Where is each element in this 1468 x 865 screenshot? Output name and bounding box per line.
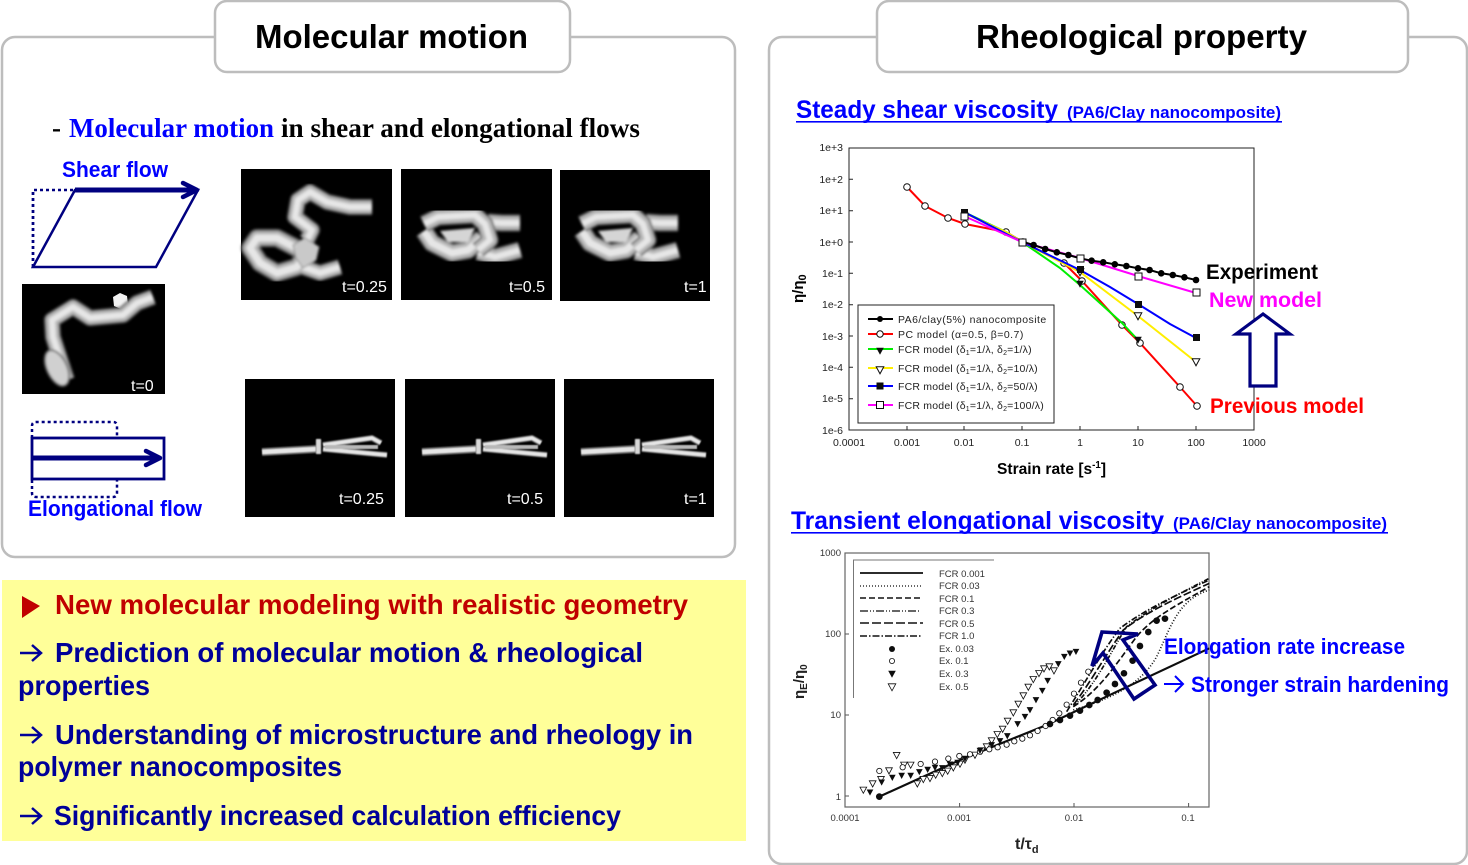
molecule image elongation t=1 <box>564 379 714 517</box>
subheading: molecular motion in flows: in shear and elongational flows <box>281 113 640 143</box>
molecule image shear t=1: t=1 <box>684 279 707 296</box>
chart legend: =1/λ, δ <box>970 381 1003 393</box>
chart legend: 2 <box>1003 387 1007 394</box>
chart legend: 2 <box>1003 406 1007 413</box>
x axis tick labels: 10 <box>1132 437 1144 449</box>
x axis title: t/τ <box>1015 836 1032 853</box>
Ex 0.1 markers <box>877 669 1091 774</box>
y axis tick labels: 1e-1 <box>822 268 843 280</box>
x axis tick labels <box>830 813 1195 824</box>
chart legend: 1 <box>966 406 970 413</box>
x axis tick labels: 0.01 <box>1065 813 1083 824</box>
chart legend: 1 <box>966 369 970 376</box>
chart legend: PA6/clay(5%) nanocomposite <box>898 314 1047 326</box>
chart legend: 1 <box>966 387 970 394</box>
title: rheological property <box>877 1 1408 72</box>
label: previous model: Previous model <box>1210 395 1364 418</box>
Ex 0.5 markers <box>860 664 1057 793</box>
Ex 0.03 markers <box>876 615 1168 800</box>
x axis tick labels: 100 <box>1187 437 1205 449</box>
x axis tick labels: 0.001 <box>894 437 920 449</box>
molecule image t=0: t=0 <box>131 378 154 395</box>
y axis title: 0 <box>797 274 809 280</box>
molecule image elongation t=0.5: t=0.5 <box>507 491 543 508</box>
molecule image elongation t=0.5 <box>405 379 555 517</box>
conclusion: understanding: polymer nanocomposites <box>18 751 342 782</box>
heading: steady shear viscosity: Steady shear viscosity <box>796 96 1058 124</box>
molecule image shear t=0.5 <box>401 169 552 300</box>
molecule image elongation t=0.25 <box>245 379 395 517</box>
y axis tick labels: 1e+1 <box>819 205 843 217</box>
y axis tick labels: 10 <box>830 710 841 721</box>
x axis tick labels: 0.01 <box>954 437 974 449</box>
conclusion: prediction: properties <box>18 670 150 701</box>
heading: transient elongational viscosity: (PA6/Clay nanocomposite) <box>1173 514 1387 533</box>
chart legend: FCR 0.1 <box>939 594 974 605</box>
x axis tick labels: 0.001 <box>947 813 971 824</box>
molecule image elongation t=1: t=1 <box>684 491 707 508</box>
chart legend: =50/λ) <box>1007 381 1038 393</box>
arrow: elongation rate increase <box>1092 632 1155 699</box>
y axis tick labels: 1 <box>836 792 841 803</box>
title: molecular motion: Molecular motion <box>255 18 528 55</box>
x axis tick labels: 1000 <box>1242 437 1266 449</box>
chart: steady shear viscosity <box>790 142 1266 478</box>
y axis tick labels: 1e+3 <box>819 142 843 154</box>
subheading: molecular motion in flows <box>52 113 640 143</box>
chart legend: =1/λ, δ <box>970 344 1003 356</box>
y axis title: η/η <box>790 280 807 303</box>
chart legend: FCR 0.5 <box>939 619 974 630</box>
y axis tick labels: 1e-6 <box>822 425 843 437</box>
chart legend: =10/λ) <box>1007 363 1038 375</box>
chart legend: PC model (α=0.5, β=0.7) <box>898 329 1024 341</box>
chart legend <box>854 560 994 698</box>
subheading: molecular motion in flows: - <box>52 113 61 143</box>
chart legend: FCR model (δ <box>898 400 966 412</box>
conclusion: efficiency: Significantly increased calculation efficiency <box>54 800 621 831</box>
chart legend: 2 <box>1003 369 1007 376</box>
series: FCR d2=10 <box>964 213 1200 366</box>
y axis tick labels <box>819 142 843 437</box>
elongational flow diagram <box>28 422 203 521</box>
y axis tick labels: 1e-4 <box>822 362 843 374</box>
y axis tick labels: 1000 <box>820 548 841 559</box>
FCR curves <box>879 578 1209 797</box>
title: molecular motion <box>215 1 570 72</box>
chart legend: 1 <box>966 350 970 357</box>
chart: transient elongational viscosity <box>791 548 1209 856</box>
conclusion: prediction: Prediction of molecular motion & rheological <box>55 637 643 668</box>
chart legend: FCR model (δ <box>898 363 966 375</box>
shear flow diagram <box>33 157 198 267</box>
heading: steady shear viscosity <box>796 96 1282 124</box>
label: elongation rate increase: Elongation rate increase <box>1164 634 1405 659</box>
x axis tick labels: 0.0001 <box>833 437 865 449</box>
y axis tick labels: 100 <box>825 629 841 640</box>
series: FCR d2=50 <box>961 209 1200 341</box>
series: FCR d2=1 <box>964 212 1142 344</box>
x axis title: Strain rate [s <box>997 461 1095 478</box>
x axis title: ] <box>1101 461 1106 478</box>
conclusion: understanding: Understanding of microstructure and rheology in <box>55 719 693 750</box>
y axis tick labels: 1e-3 <box>822 331 843 343</box>
chart legend: Ex. 0.5 <box>939 682 969 693</box>
chart legend: FCR model (δ <box>898 344 966 356</box>
y axis tick labels: 1e+0 <box>819 237 843 249</box>
series: experiment <box>961 213 1200 296</box>
Ex 0.3 markers <box>867 649 1079 796</box>
chart legend: =1/λ, δ <box>970 400 1003 412</box>
series: FCR d2=100 <box>964 216 1196 293</box>
chart legend: Ex. 0.03 <box>939 644 974 655</box>
heading: transient elongational viscosity <box>791 507 1388 535</box>
molecule image shear t=0.25 <box>241 169 392 300</box>
shear flow diagram: Shear flow <box>62 157 169 182</box>
chart legend: FCR 0.001 <box>939 569 985 580</box>
panel: molecular motion <box>2 37 735 557</box>
plot curves and markers <box>860 578 1209 800</box>
subheading: molecular motion in flows: Molecular motion <box>69 113 274 143</box>
panel: rheological property <box>769 37 1467 864</box>
conclusion: new molecular modeling: New molecular modeling with realistic geometry <box>55 589 688 620</box>
chart legend: =1/λ) <box>1007 344 1032 356</box>
y axis title: 0 <box>799 664 810 670</box>
chart legend: FCR 1.0 <box>939 631 974 642</box>
y axis tick labels <box>820 548 841 803</box>
conclusion: prediction <box>18 637 643 701</box>
molecule image elongation t=0.25: t=0.25 <box>339 491 384 508</box>
chart legend: =100/λ) <box>1007 400 1044 412</box>
y axis tick labels: 1e-5 <box>822 393 843 405</box>
elongational flow diagram: Elongational flow <box>28 496 203 521</box>
y axis title: E <box>799 683 810 690</box>
heading: steady shear viscosity: (PA6/Clay nanocomposite) <box>1067 103 1281 122</box>
chart legend: FCR 0.3 <box>939 606 974 617</box>
label: stronger strain hardening: Stronger strain hardening <box>1191 672 1449 697</box>
x axis title: -1 <box>1092 460 1101 471</box>
conclusion: understanding <box>18 719 693 782</box>
heading: transient elongational viscosity: Transient elongational viscosity <box>791 507 1164 535</box>
x axis tick labels <box>833 437 1266 449</box>
x axis title: d <box>1032 844 1039 856</box>
y axis title: /η <box>791 670 808 683</box>
y axis tick labels: 1e+2 <box>819 174 843 186</box>
molecule image t=0 <box>22 284 165 395</box>
conclusions box <box>2 580 746 841</box>
chart legend <box>858 305 1054 423</box>
x axis tick labels: 0.0001 <box>830 813 860 824</box>
chart legend: Ex. 0.3 <box>939 669 969 680</box>
arrow: improvement up <box>1236 314 1290 386</box>
chart legend: Ex. 0.1 <box>939 656 969 667</box>
molecule image shear t=0.5: t=0.5 <box>509 279 545 296</box>
label: experiment: Experiment <box>1206 261 1318 284</box>
x axis tick labels: 0.1 <box>1181 813 1195 824</box>
label: new model: New model <box>1209 289 1322 312</box>
chart legend: 2 <box>1003 350 1007 357</box>
y axis title: η <box>791 690 808 699</box>
chart legend: FCR 0.03 <box>939 581 980 592</box>
chart legend: =1/λ, δ <box>970 363 1003 375</box>
chart legend: FCR model (δ <box>898 381 966 393</box>
y axis tick labels: 1e-2 <box>822 299 843 311</box>
x axis tick labels: 1 <box>1077 437 1083 449</box>
molecule image shear t=0.25: t=0.25 <box>342 279 387 296</box>
x axis tick labels: 0.1 <box>1015 437 1029 449</box>
series: PC model <box>904 184 1200 409</box>
title: rheological property: Rheological property <box>976 18 1308 55</box>
molecule image shear t=1 <box>560 170 710 301</box>
